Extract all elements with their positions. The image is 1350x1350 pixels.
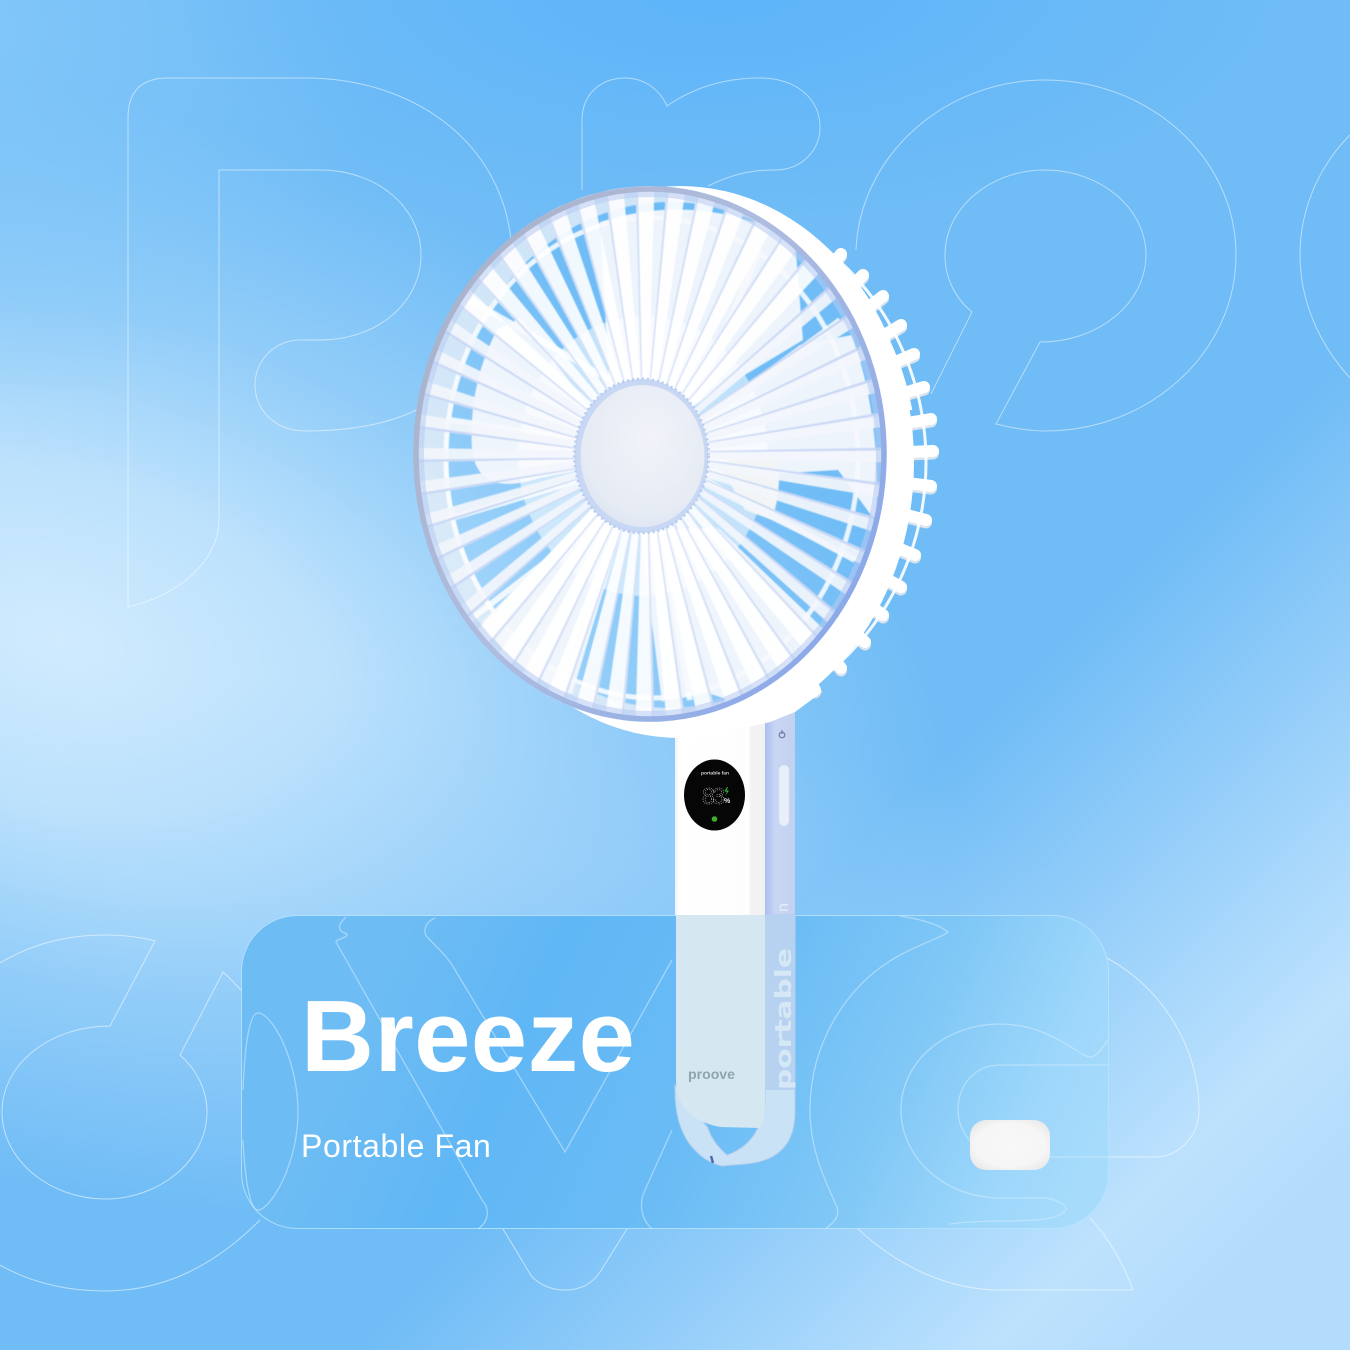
side teeth <box>804 254 933 692</box>
subheading: Portable Fan <box>301 1128 491 1164</box>
front rim ring <box>416 189 884 719</box>
strap brand text: portable <box>772 948 797 1090</box>
blade core disc <box>518 316 768 596</box>
glass card <box>242 916 1108 1228</box>
motor arm <box>732 474 780 520</box>
translucent rim flange <box>419 186 754 722</box>
handle body tinted by glass <box>676 915 765 1128</box>
interior blades and ribs <box>407 186 892 724</box>
handle front panel <box>675 715 765 915</box>
battery percentage: 83 <box>702 783 725 809</box>
teeth shading <box>804 256 933 692</box>
product: handle and strap upper part <box>675 712 795 915</box>
outlined background letters, top row <box>128 78 1350 607</box>
band mount <box>700 660 822 738</box>
hub <box>574 379 708 533</box>
icon: green fan mode <box>712 816 717 822</box>
heading: Breeze <box>301 981 635 1093</box>
refracted letter outlines inside card <box>243 916 1108 1229</box>
icon: charging bolt <box>724 787 729 796</box>
display brand text: portable fan <box>701 770 729 776</box>
strap loop <box>675 915 795 1166</box>
strap brand suffix: n <box>775 903 792 912</box>
fan head <box>406 186 933 738</box>
fan blades <box>472 210 877 706</box>
strap shaded column <box>765 915 795 1090</box>
back lattice <box>445 215 858 700</box>
round display <box>684 760 745 830</box>
icon: power button <box>779 730 785 738</box>
percent sign: % <box>724 798 731 805</box>
radial ribs <box>407 186 883 724</box>
strap clasp <box>711 1156 713 1163</box>
side strap <box>765 712 795 915</box>
outlined background letters, bottom row <box>0 935 1199 1291</box>
product: handle lower part through glass <box>675 903 797 1166</box>
white pill badge <box>970 1120 1050 1170</box>
strap side button <box>779 765 789 826</box>
back band, upper part <box>780 230 912 410</box>
inner translucent rim band <box>421 194 879 714</box>
proove logo: proove <box>688 1066 735 1082</box>
teeth tops <box>804 254 933 690</box>
white outer band <box>572 186 914 738</box>
back grille ring <box>830 252 928 673</box>
